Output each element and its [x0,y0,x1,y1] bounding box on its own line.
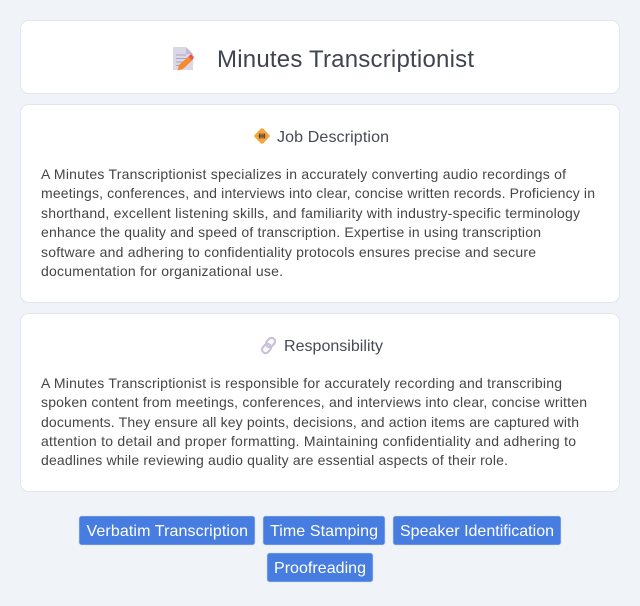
panel: job description [20,104,620,302]
text block: job description: A Minutes Transcriptionist specializes in accurately converting audio recordings of [41,166,566,182]
tag: proofreading: Proofreading [274,560,366,577]
text block: job description: documentation for organizational use. [41,263,283,279]
tag: verbatim transcription [79,516,255,545]
text block: responsibility [41,375,587,468]
icon: link [261,336,276,355]
panel: responsibility [20,314,620,492]
text block: responsibility: deadlines while reviewing audio quality are essential aspects of their role. [41,452,508,468]
tag: speaker identification [393,516,561,545]
text block: responsibility: attention to detail and proper formatting. Maintaining confidentiality and adhering to [41,433,576,449]
heading: job description: Job Description [277,129,389,146]
tag: time stamping: Time Stamping [270,523,378,540]
icon: document with pencil [173,47,194,70]
icon: diamond road sign [254,128,270,144]
tag: proofreading [267,553,373,582]
tag: speaker identification: Speaker Identification [400,523,554,540]
text block: responsibility: A Minutes Transcriptionist is responsible for accurately recording and transcribing [41,375,562,391]
title: Minutes Transcriptionist [217,46,474,73]
panel: title card [20,20,620,94]
text block: job description: shorthand, excellent listening skills, and familiarity with industry-specific terminology [41,205,580,221]
text block: job description [41,166,595,279]
text block: job description: enhance the quality and speed of transcription. Expertise in using transcription [41,224,541,240]
heading: responsibility: Responsibility [284,338,383,355]
text block: responsibility: spoken content from meetings, conferences, and interviews into clear, concise written [41,394,587,410]
tag: time stamping [263,516,385,545]
text block: job description: meetings, conferences, and interviews into clear, concise written records. Proficiency in [41,185,595,201]
tag: verbatim transcription: Verbatim Transcription [86,523,248,540]
text block: job description: software and adhering to confidentiality protocols ensures precise and secure [41,244,536,260]
text block: responsibility: documents. They ensure all key points, decisions, and action items are captured with [41,414,579,430]
